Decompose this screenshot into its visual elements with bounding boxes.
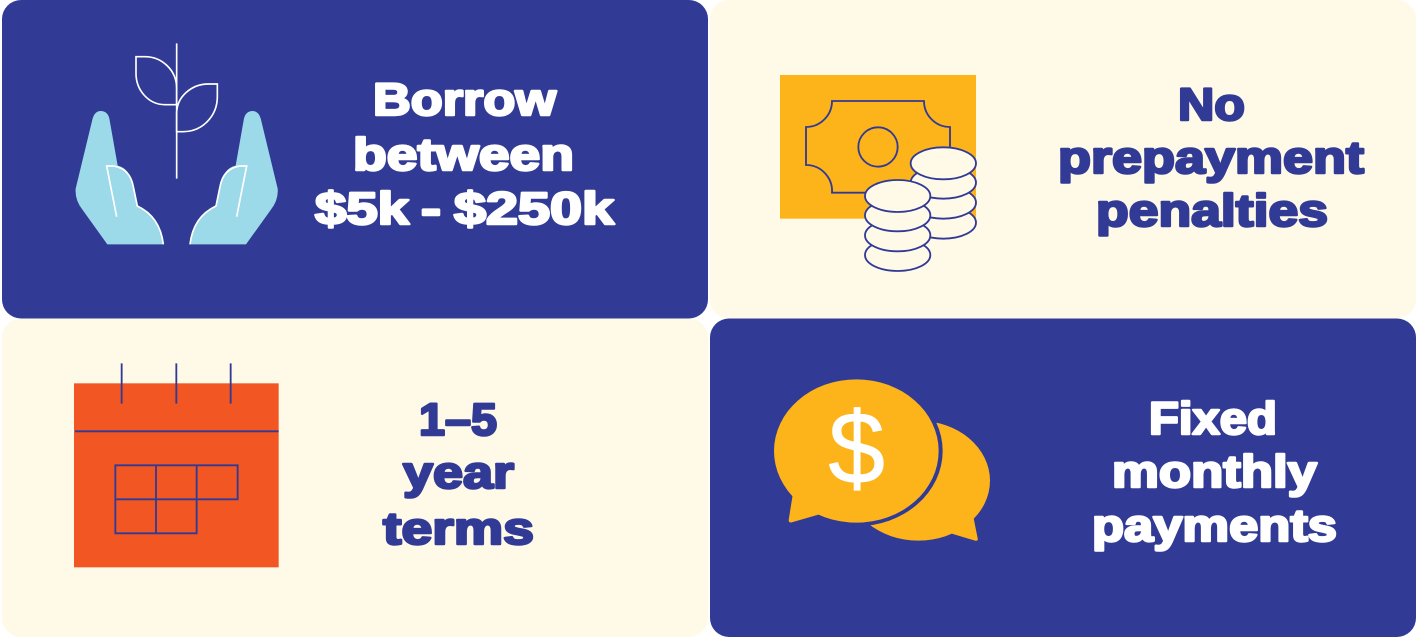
heading: fixed monthly payments xyxy=(1092,393,1337,551)
heading: fixed monthly payments: Fixed xyxy=(1149,393,1277,444)
heading: 1-5 year terms: 1–5 xyxy=(419,394,497,445)
icon: hands holding plant xyxy=(76,43,278,244)
heading: 1-5 year terms: year xyxy=(403,447,514,498)
heading: borrow between $5k - $250k: Borrow xyxy=(373,74,557,125)
icon: banknote and coins xyxy=(780,75,976,271)
icon: calendar xyxy=(74,363,279,567)
heading: fixed monthly payments: monthly xyxy=(1112,446,1317,497)
panel background: navy xyxy=(2,0,708,318)
panel background: navy xyxy=(710,318,1416,637)
heading: no prepayment penalties: No xyxy=(1178,79,1245,130)
panel background: cream xyxy=(710,0,1416,318)
heading: borrow between $5k - $250k: - xyxy=(421,183,441,234)
heading: no prepayment penalties xyxy=(1058,79,1364,236)
panel: no prepayment penalties xyxy=(710,0,1416,318)
heading: no prepayment penalties: prepayment xyxy=(1058,132,1364,183)
panel: loan terms xyxy=(2,318,708,637)
heading: borrow between $5k - $250k xyxy=(315,74,615,234)
icon: speech bubbles with dollar sign xyxy=(770,376,990,541)
heading: 1-5 year terms: terms xyxy=(383,503,534,554)
heading: no prepayment penalties: penalties xyxy=(1096,185,1328,236)
heading: borrow between $5k - $250k: $5k xyxy=(315,183,410,234)
heading: borrow between $5k - $250k: $250k xyxy=(454,183,615,234)
panel: borrow amount xyxy=(2,0,708,318)
heading: fixed monthly payments: payments xyxy=(1092,500,1337,551)
panel background: cream xyxy=(2,318,708,637)
dollar sign: $ xyxy=(828,392,885,506)
panel: fixed monthly payments xyxy=(710,318,1416,637)
heading: 1-5 year terms xyxy=(383,394,534,554)
heading: borrow between $5k - $250k: between xyxy=(353,129,574,180)
